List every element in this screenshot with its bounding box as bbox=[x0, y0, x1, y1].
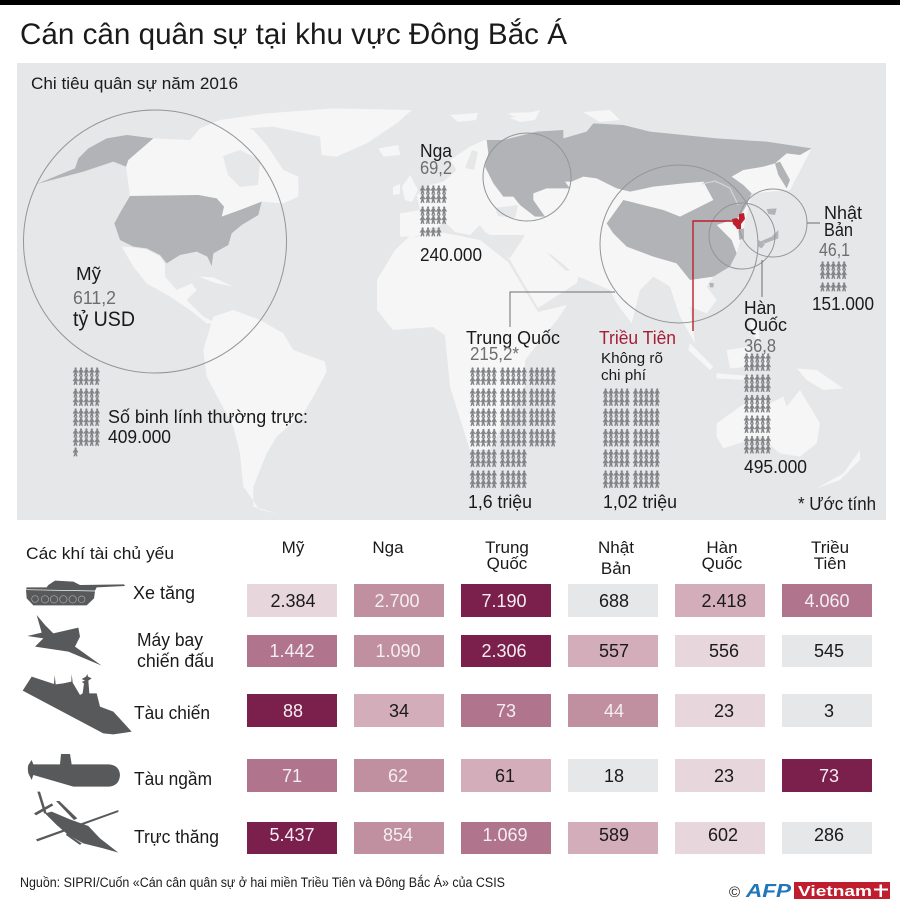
table column headers: Hàn bbox=[706, 538, 738, 557]
USA troops label bbox=[108, 407, 308, 447]
North Korea soldiers pictogram bbox=[603, 388, 660, 488]
leader line: North Korea bbox=[693, 221, 733, 331]
table column headers: Quốc bbox=[487, 554, 528, 573]
North Korea label bbox=[599, 328, 676, 384]
table: tanks row: 7.190 bbox=[481, 591, 527, 611]
footnote: estimate: * Ước tính bbox=[798, 494, 876, 514]
table: fighter jets row: 1.442 bbox=[269, 641, 315, 661]
table column headers: Bản bbox=[601, 559, 631, 578]
Japan label: Bản bbox=[824, 220, 853, 240]
North Korea label: Triều Tiên bbox=[599, 328, 676, 348]
table: warships row: 34 bbox=[389, 701, 409, 721]
China label: 215,2* bbox=[470, 344, 519, 364]
table: submarines row: 23 bbox=[714, 766, 734, 786]
Japan soldiers pictogram bbox=[820, 261, 847, 291]
icon: tank bbox=[26, 581, 125, 605]
icon: fighter jet bbox=[27, 615, 102, 666]
table: fighter jets row bbox=[247, 635, 872, 667]
table: submarines row: 62 bbox=[388, 766, 408, 786]
USA label bbox=[73, 264, 135, 331]
Russia label: 69,2 bbox=[420, 158, 452, 178]
label: fighter jets: Máy bay bbox=[137, 630, 203, 650]
table: tanks row: 2.418 bbox=[701, 591, 747, 611]
table: helicopters row: 602 bbox=[708, 825, 738, 845]
icon: warship bbox=[23, 674, 132, 734]
label: warships: Tàu chiến bbox=[134, 703, 210, 723]
map shape: North Korea bbox=[732, 213, 745, 229]
table: submarines row: 71 bbox=[282, 766, 302, 786]
source note: Nguồn: SIPRI/Cuốn «Cán cân quân sự ở hai miền Triều Tiên và Đông Bắc Á» của CSIS bbox=[20, 875, 505, 890]
circle: Japan spending bbox=[739, 189, 807, 257]
table: helicopters row bbox=[247, 822, 872, 854]
circle: China spending bbox=[600, 165, 758, 323]
table: warships row: 88 bbox=[283, 701, 303, 721]
China label bbox=[466, 328, 560, 364]
table column headers bbox=[282, 538, 849, 578]
table: warships row: 44 bbox=[604, 701, 624, 721]
table: submarines row: 18 bbox=[604, 766, 624, 786]
table: warships row: 73 bbox=[496, 701, 516, 721]
label: helicopters: Trực thăng bbox=[134, 827, 219, 847]
table: tanks row: 2.700 bbox=[374, 591, 420, 611]
North Korea troops: 1,02 triệu bbox=[603, 492, 677, 512]
circle: Russia spending bbox=[483, 133, 571, 221]
title: Cán cân quân sự tại khu vực Đông Bắc Á bbox=[20, 18, 567, 51]
table: submarines row: 73 bbox=[819, 766, 839, 786]
Russia troops: 240.000 bbox=[420, 245, 482, 265]
table: tanks row: 2.384 bbox=[270, 591, 316, 611]
label: fighter jets: chiến đấu bbox=[137, 651, 214, 671]
table: helicopters row: 854 bbox=[383, 825, 413, 845]
USA and Alaska in dark bbox=[37, 135, 262, 266]
table: fighter jets row: 557 bbox=[599, 641, 629, 661]
table column headers: Tiên bbox=[814, 554, 846, 573]
table column headers: Nga bbox=[372, 538, 404, 557]
Japan label: Nhật bbox=[824, 203, 862, 223]
label: tanks: Xe tăng bbox=[133, 583, 195, 603]
map heading: Chi tiêu quân sự năm 2016 bbox=[31, 74, 238, 93]
South Korea troops: 495.000 bbox=[744, 457, 807, 477]
arctic islands and UK bbox=[393, 110, 620, 202]
USA soldiers pictogram bbox=[73, 367, 100, 456]
table: tanks row: 4.060 bbox=[804, 591, 850, 611]
circle: South Korea spending bbox=[709, 203, 775, 269]
logo: AFP and Vietnam+ bbox=[729, 881, 890, 901]
table: helicopters row: 589 bbox=[599, 825, 629, 845]
label: submarines: Tàu ngầm bbox=[134, 769, 212, 789]
Russia, China, Japan, South Korea in dark bbox=[485, 123, 812, 287]
table column headers: Trung bbox=[485, 538, 529, 557]
table: helicopters row: 5.437 bbox=[269, 825, 315, 845]
table: helicopters row: 286 bbox=[814, 825, 844, 845]
table column headers: Nhật bbox=[598, 538, 634, 557]
USA label: 611,2 bbox=[73, 288, 116, 308]
circle: USA spending bbox=[24, 110, 286, 373]
equipment section heading: Các khí tài chủ yếu bbox=[26, 544, 174, 563]
table: fighter jets row: 545 bbox=[814, 641, 844, 661]
Russia label: Nga bbox=[420, 141, 453, 161]
table: submarines row bbox=[247, 759, 872, 792]
South Korea label: 36,8 bbox=[744, 336, 776, 356]
Russia label bbox=[420, 141, 453, 178]
South Korea label: Hàn bbox=[744, 298, 776, 318]
Japan label bbox=[819, 203, 862, 260]
China soldiers pictogram bbox=[470, 367, 556, 488]
table: submarines row: 61 bbox=[495, 766, 515, 786]
table: warships row: 23 bbox=[714, 701, 734, 721]
panel: world map of military spending bbox=[17, 63, 886, 520]
Japan label: 46,1 bbox=[819, 240, 850, 260]
table column headers: Triều bbox=[811, 538, 849, 557]
icon: helicopter bbox=[34, 792, 118, 853]
leader line: China bbox=[510, 292, 615, 327]
table: fighter jets row: 556 bbox=[709, 641, 739, 661]
mediterranean, black sea, baltic and gulf bbox=[410, 150, 570, 271]
table: tanks row: 688 bbox=[599, 591, 629, 611]
table: helicopters row: 1.069 bbox=[482, 825, 528, 845]
China label: Trung Quốc bbox=[466, 328, 560, 348]
logo: AFP and Vietnam+: AFP bbox=[745, 881, 792, 901]
table: fighter jets row: 1.090 bbox=[375, 641, 421, 661]
table: warships row bbox=[247, 694, 872, 727]
table: tanks row bbox=[247, 584, 872, 617]
South Korea label bbox=[744, 298, 787, 356]
label: fighter jets bbox=[137, 630, 214, 671]
South Korea soldiers pictogram bbox=[744, 353, 771, 453]
USA label: tỷ USD bbox=[73, 308, 135, 331]
leader line: South Korea bbox=[761, 260, 763, 297]
mongolia outline bbox=[702, 181, 738, 205]
Russia soldiers pictogram bbox=[420, 185, 447, 236]
USA label: Mỹ bbox=[76, 264, 101, 284]
table column headers: Quốc bbox=[702, 554, 743, 573]
table: fighter jets row: 2.306 bbox=[481, 641, 527, 661]
leader line: Japan bbox=[807, 222, 820, 224]
logo: AFP and Vietnam+: © bbox=[729, 884, 740, 901]
logo: AFP and Vietnam+: Vietnam bbox=[798, 883, 872, 900]
USA troops label: Số binh lính thường trực: bbox=[108, 407, 308, 427]
table: warships row: 3 bbox=[824, 701, 834, 721]
South Korea label: Quốc bbox=[744, 315, 787, 335]
table column headers: Mỹ bbox=[282, 538, 305, 557]
North Korea label: Không rõ bbox=[601, 350, 663, 367]
icon: submarine bbox=[28, 754, 120, 787]
Japan troops: 151.000 bbox=[812, 294, 874, 314]
world map bbox=[37, 108, 860, 513]
China troops: 1,6 triệu bbox=[468, 492, 532, 512]
hudson bay bbox=[223, 150, 260, 187]
North Korea label: chi phí bbox=[601, 367, 647, 384]
USA troops label: 409.000 bbox=[108, 427, 171, 447]
